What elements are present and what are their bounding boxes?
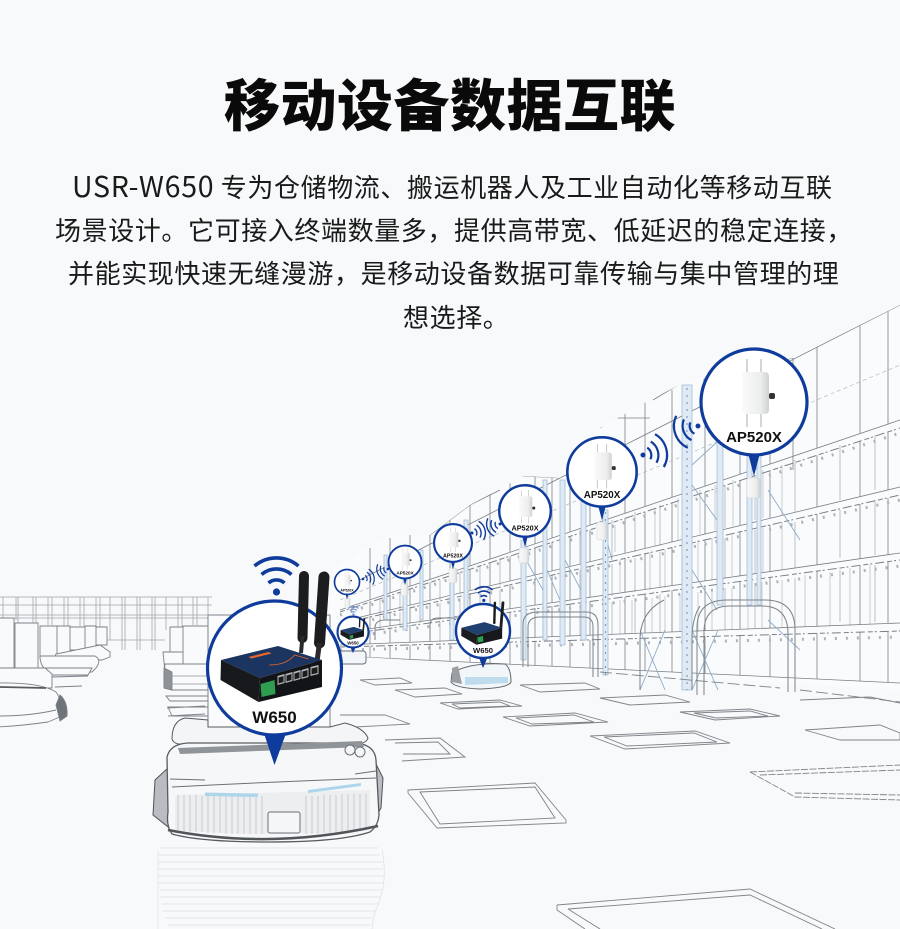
AP520X bubble 6: AP520X xyxy=(340,588,354,592)
AP520X bubble large xyxy=(701,349,807,476)
main robot xyxy=(153,615,383,842)
robot body xyxy=(167,743,379,842)
robot status lights xyxy=(205,783,361,797)
white box on robot xyxy=(208,615,330,728)
wifi between access points 4 xyxy=(484,515,505,538)
pointer xyxy=(264,732,286,765)
W650 bubble medium xyxy=(456,587,510,668)
line 4: 想选择。 xyxy=(403,298,509,335)
line 2: 场景设计。它可接入终端数量多，提供高带宽、低延迟的稳定连接， xyxy=(55,211,853,248)
label: W650 xyxy=(252,708,297,727)
AP520X bubble 6 xyxy=(334,569,360,599)
W650 bubble medium: W650 xyxy=(473,646,493,655)
wifi between access points 6 xyxy=(375,561,392,580)
wifi between access points 5 xyxy=(360,568,376,587)
W650 bubble main xyxy=(208,558,342,765)
mounted access points xyxy=(345,478,760,608)
robot side bumpers xyxy=(153,762,383,830)
W650 bubble small: W650 xyxy=(347,640,359,645)
wifi between access points 1 xyxy=(636,432,671,472)
line 1: USR-W650 专为仓储物流、搬运机器人及工业自动化等移动互联 xyxy=(72,165,833,206)
wifi icon xyxy=(254,558,298,596)
title: 移动设备数据互联 xyxy=(224,62,676,143)
warehouse illustration xyxy=(0,305,900,929)
AP520X bubble 3 xyxy=(499,485,551,547)
AP520X bubble 3: AP520X xyxy=(511,523,539,532)
AP520X bubble 4: AP520X xyxy=(443,553,463,559)
line 3: 并能实现快速无缝漫游，是移动设备数据可靠传输与集中管理的理 xyxy=(68,254,839,291)
description text xyxy=(55,165,853,335)
low shelving at far left xyxy=(0,597,212,650)
main robot reflection xyxy=(158,848,384,929)
W650 bubble small xyxy=(338,607,368,653)
robot ribs xyxy=(175,790,370,834)
AP520X bubble 4 xyxy=(434,524,472,569)
warehouse shelving xyxy=(330,305,900,690)
blue upright columns xyxy=(384,385,761,690)
background robots at left xyxy=(0,618,208,727)
AP520X bubble medium: AP520X xyxy=(584,490,621,501)
wifi between access points 2 xyxy=(670,409,706,450)
wifi between access points 3 xyxy=(468,520,487,543)
AP520X bubble 5: AP520X xyxy=(396,570,415,575)
AP520X bubble 5 xyxy=(389,546,421,585)
AP520X bubble medium xyxy=(567,437,637,520)
small robots xyxy=(336,651,511,689)
circle xyxy=(208,601,342,735)
robot top plate xyxy=(172,718,368,744)
router xyxy=(220,576,324,702)
gate arches xyxy=(375,600,795,695)
floor markings xyxy=(167,672,900,929)
AP520X bubble large: AP520X xyxy=(726,429,782,446)
robot front panel xyxy=(268,812,300,833)
